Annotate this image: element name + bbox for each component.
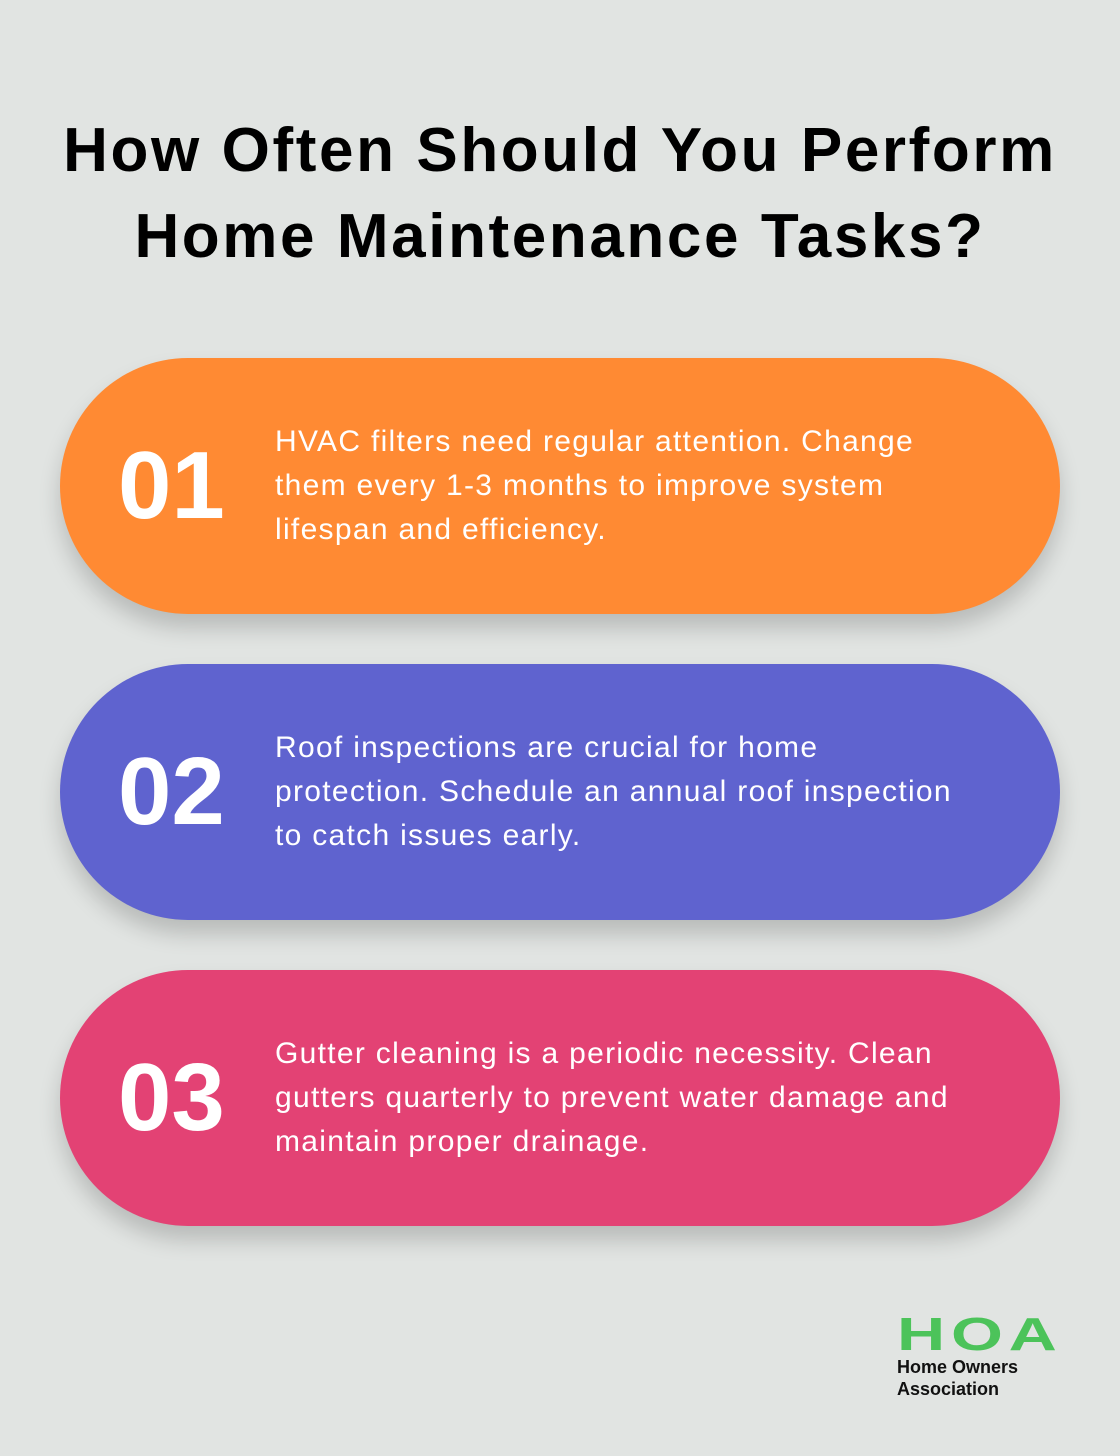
logo: HOA (897, 1308, 1063, 1399)
text 02: protection. Schedule an annual roof inspection (275, 775, 952, 808)
title: Home Maintenance Tasks? (134, 202, 986, 271)
text 01: HVAC filters need regular attention. Change (275, 425, 914, 458)
number 03: 03 (118, 1044, 225, 1151)
text 01 (275, 425, 914, 546)
text 02: to catch issues early. (275, 819, 582, 852)
title (63, 116, 1057, 271)
card 03: gutters (60, 970, 1060, 1226)
logo: HOA: Home Owners (897, 1357, 1018, 1377)
text 03: Gutter cleaning is a periodic necessity. Clean (275, 1037, 933, 1070)
card 01: HVAC (60, 358, 1060, 614)
card 02: roof (60, 664, 1060, 920)
logo: HOA: Association (897, 1379, 999, 1399)
text 02: Roof inspections are crucial for home (275, 731, 818, 764)
text 01: them every 1-3 months to improve system (275, 469, 884, 502)
title: How Often Should You Perform (63, 116, 1057, 185)
number 01: 01 (118, 432, 225, 539)
text 03: gutters quarterly to prevent water damage and (275, 1081, 949, 1114)
number 02: 02 (118, 738, 225, 845)
text 03: maintain proper drainage. (275, 1125, 649, 1158)
text 03 (275, 1037, 949, 1158)
text 01: lifespan and efficiency. (275, 513, 607, 546)
logo: HOA: HOA (897, 1308, 1063, 1360)
text 02 (275, 731, 952, 852)
